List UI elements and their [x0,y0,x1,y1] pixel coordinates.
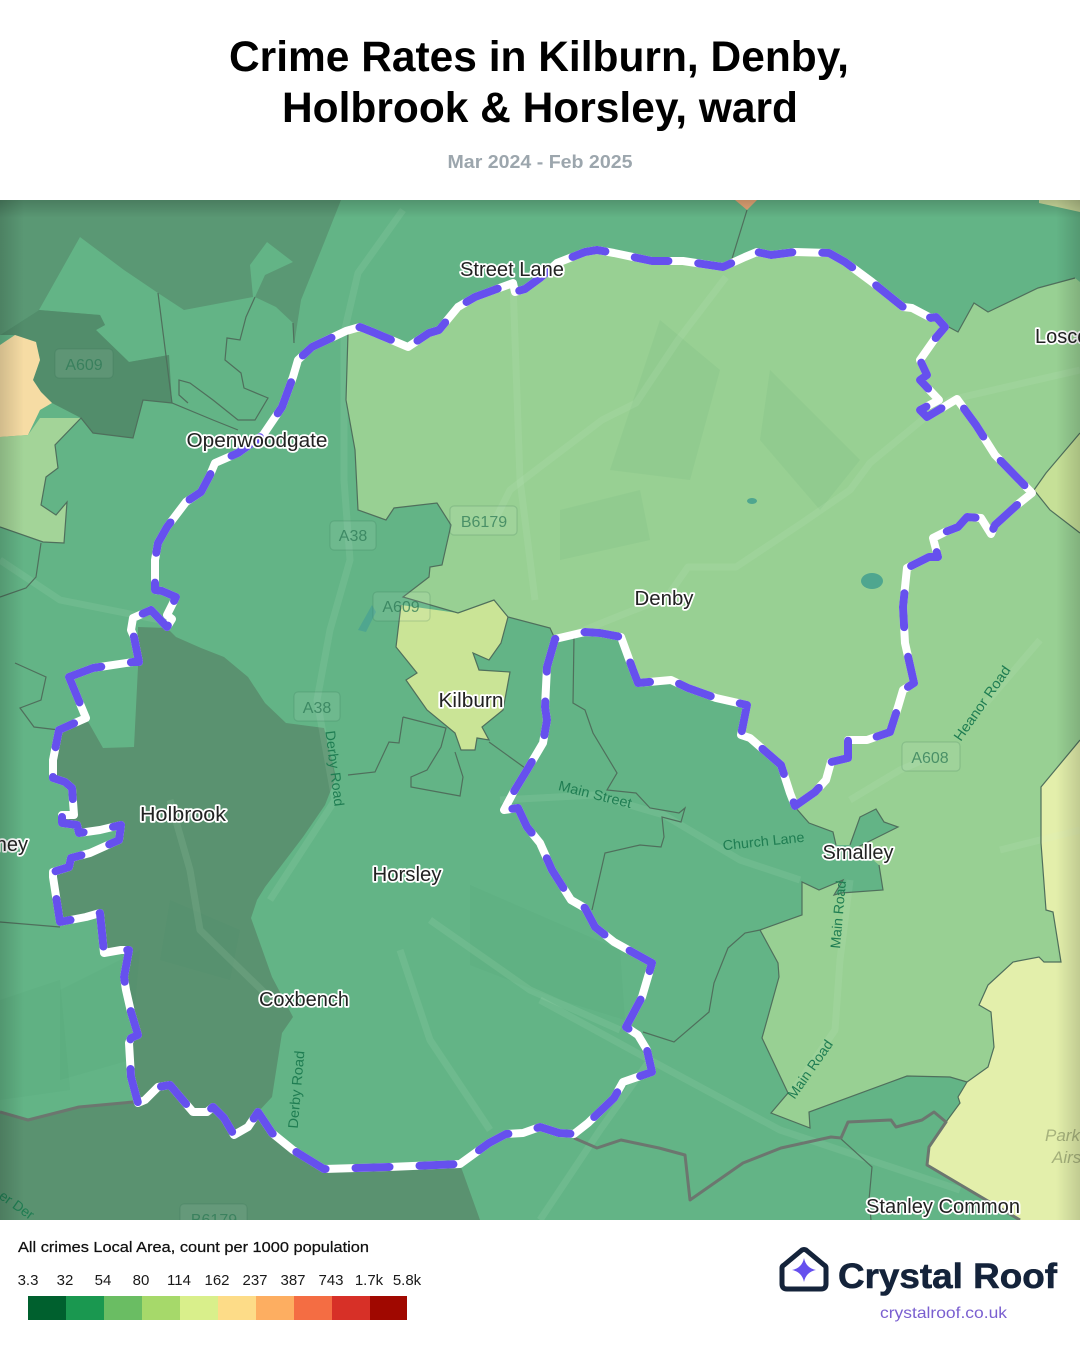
place labels: Smalley [822,842,894,864]
road shields: B6179 [461,514,507,531]
brand name: Crystal Roof [838,1257,1057,1296]
map edge vignette [0,200,1080,1220]
airfield label: Park [1045,1126,1080,1145]
region: darkest west area [0,310,172,438]
airfield label [1046,1129,1080,1163]
road labels: Heanor Road [950,663,1014,744]
logo: Crystal Roof [782,1250,1057,1322]
region: east yellow-green [1034,433,1080,533]
road labels: Derby Road [285,1050,307,1129]
region: south-east pale yellow [927,740,1080,1220]
place labels: Coxbench [259,989,349,1011]
legend ticks: 387 [280,1272,306,1289]
region: western light area [0,418,81,543]
place labels: Openwoodgate [186,430,328,452]
road labels: Main Road [827,880,849,949]
legend ticks: 114 [167,1272,191,1289]
region: orange high-crime area [0,335,52,437]
icon: house with star [782,1250,826,1289]
road labels: Main Road [784,1037,836,1102]
place labels: Stanley Common [866,1196,1020,1218]
region: Denby light green [346,250,1080,1128]
region: south dark [0,1085,480,1220]
legend ticks: 237 [242,1272,268,1289]
legend ticks: 54 [95,1272,111,1289]
legend ticks: 162 [204,1272,230,1289]
place labels: Horsley [372,864,442,886]
road shields: A38 [303,700,331,717]
place labels: Denby [634,588,694,610]
road shields: A609 [382,599,420,616]
road shields: B6179 [191,1212,237,1229]
road labels: Church Lane [722,829,805,853]
subtitle: date range: Mar 2024 - Feb 2025 [448,152,632,172]
website: crystalroof.co.uk [880,1305,1008,1322]
road labels: Main Street [557,777,634,811]
ward boundary: white and purple dashed line [53,250,1032,1169]
road labels: Derby Road [322,730,348,807]
road shields: A38 [339,528,367,545]
place labels: Kilburn [438,690,504,712]
title: Crime Rates in Kilburn, Denby, [229,33,849,81]
region: Kilburn [396,600,510,750]
place labels: Street Lane [460,259,564,281]
place labels: Holbrook [140,804,227,826]
legend ticks: 1.7k [355,1272,384,1289]
region: top-right pale [1039,200,1080,212]
title: Holbrook & Horsley, ward [282,84,798,132]
legend title: All crimes Local Area, count per 1000 population [18,1239,369,1256]
legend ticks: 3.3 [18,1272,38,1289]
region: north-west dark area [0,200,341,341]
legend [18,1239,422,1320]
legend ticks: 743 [318,1272,344,1289]
legend ticks: 80 [133,1272,149,1289]
road shields [55,349,960,1233]
road labels [0,663,1014,1223]
region: top orange tip [735,200,757,210]
region: Holbrook dark [53,627,336,1135]
panel: choropleth map [0,200,1080,1233]
title [229,33,849,132]
water features [358,498,883,632]
place labels [0,259,1080,1218]
legend ticks [18,1272,422,1289]
road shields: A609 [65,357,103,374]
legend ticks: 5.8k [393,1272,422,1289]
roads: faint lighter lines [0,208,961,1220]
legend colour scale [28,1296,407,1320]
terrain: faint woodland patches [0,320,860,1100]
boundaries: thin area lines [0,210,1080,1220]
road shields: A608 [911,750,949,767]
boundary: thick grey council line [0,1102,1020,1220]
legend ticks: 32 [57,1272,73,1289]
region: Belper mid patches [39,237,294,362]
